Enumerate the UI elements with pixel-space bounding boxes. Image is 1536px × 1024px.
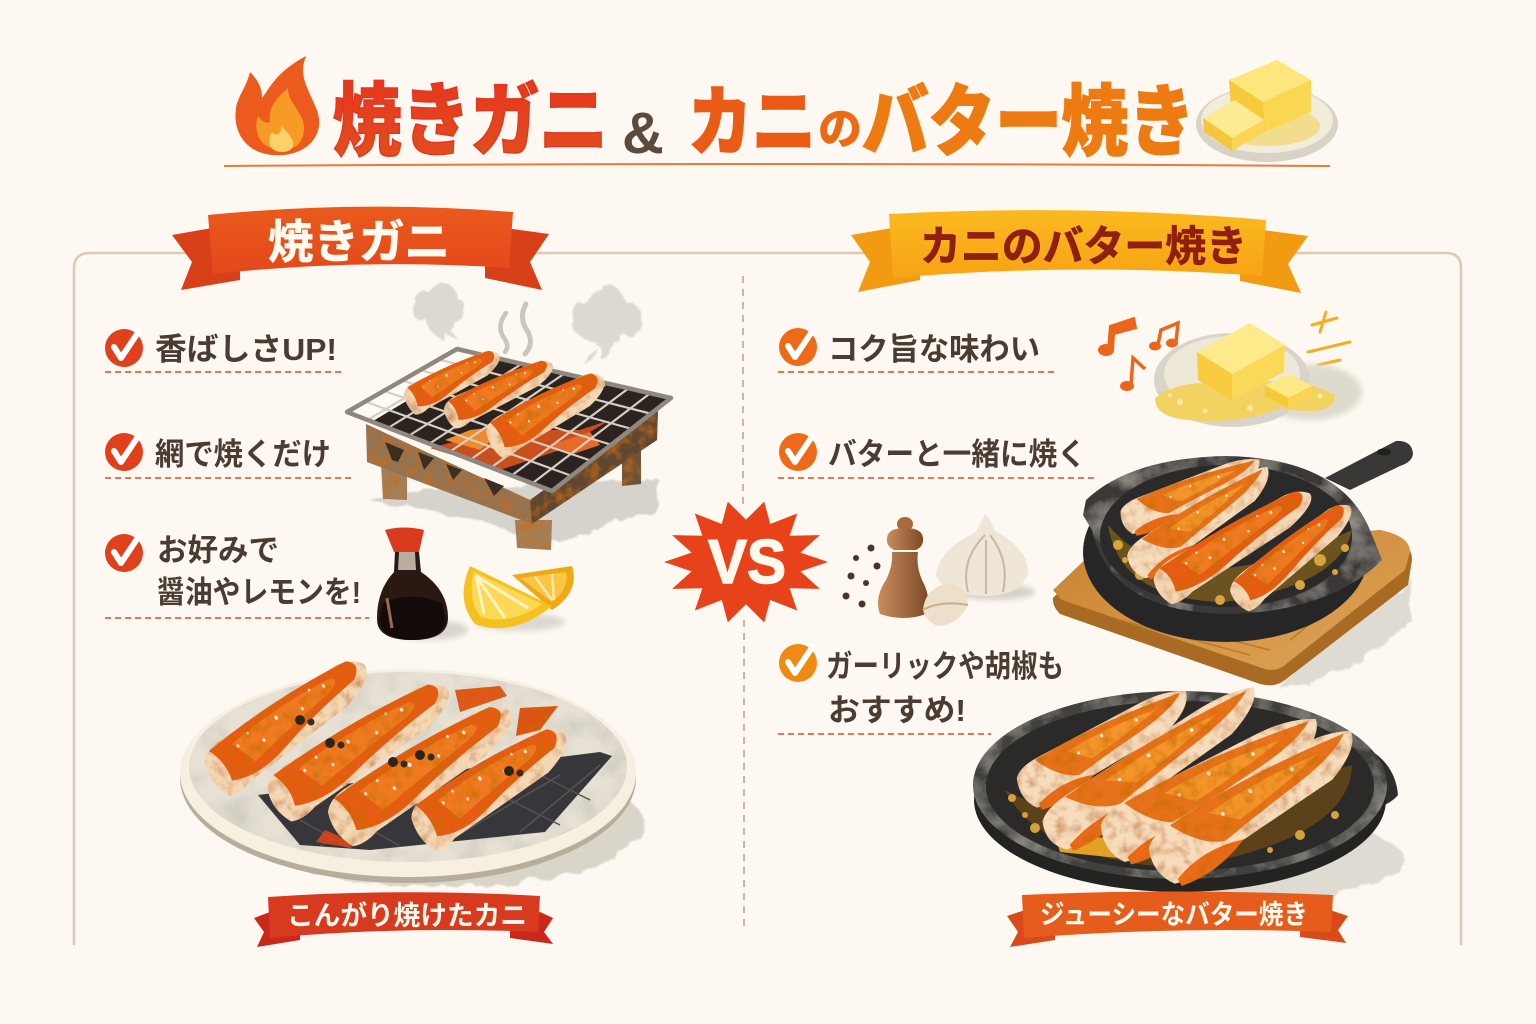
grill box: [366, 408, 658, 524]
icon: butter plate: [1196, 60, 1338, 162]
board shadow: [1280, 580, 1412, 690]
crab legs in pan: [1010, 678, 1376, 895]
skillet body: [1083, 462, 1369, 642]
point: 香ばしさUP: [105, 329, 344, 372]
icon: garlic: [923, 514, 1035, 626]
VS badge: VS: [708, 528, 786, 597]
point: バターと一緒に焼く: [778, 433, 1096, 478]
ribbon: こんがり焼けたカニ: こんがり焼けたカニ: [287, 900, 527, 931]
point: コク旨な味わい: [778, 328, 1054, 372]
grill shadow: [368, 480, 660, 548]
VS badge: [664, 502, 828, 622]
point: 醤油やレモン: お好みで: [157, 533, 279, 568]
crab legs on grill: [400, 344, 615, 461]
point: ガーリックや胡椒も: ガーリックや胡椒も: [826, 649, 1064, 684]
icon: peppercorns: [842, 544, 880, 608]
icon: lemon: [464, 566, 574, 631]
ribbon: こんがり焼けたカニ: [254, 892, 553, 947]
plate: [180, 673, 636, 883]
title: カニ: [688, 81, 816, 166]
title: &: [622, 101, 664, 166]
point: ガーリックや胡椒も: おすすめ!: [828, 693, 966, 728]
board: [1053, 530, 1412, 685]
crab legs on plate: [196, 648, 582, 856]
icon: smoke: [410, 283, 642, 363]
coals: [350, 349, 670, 490]
list: 焼きガニ points: [105, 329, 369, 618]
point: 醤油やレモン: [105, 533, 369, 618]
plate shadow: [235, 763, 645, 887]
banner: 焼きガニ: [172, 207, 549, 290]
icon: music notes: [1098, 318, 1178, 391]
illustration: charcoal grill: [347, 344, 671, 550]
grate: [365, 354, 652, 484]
grill mat: [258, 752, 612, 850]
ribbon: ジューシーなバター焼き: ジューシーなバター焼き: [1040, 900, 1308, 930]
center divider: [743, 276, 744, 932]
point: ガーリックや胡椒も: [778, 644, 1064, 734]
icon: pepper mill: [878, 517, 928, 618]
illustration: grilled crab plate: [180, 648, 645, 887]
point: 香ばしさUP: 香ばしさUP!: [155, 332, 337, 367]
ribbon: ジューシーなバター焼き: [1007, 892, 1348, 947]
crab legs in skillet: [1116, 452, 1364, 615]
pan shadow: [1115, 820, 1405, 900]
illustration: butter-fried crab pan: [973, 678, 1405, 900]
title underline: [224, 164, 1330, 166]
icon: flame: [235, 56, 319, 155]
title: の: [818, 105, 862, 154]
banner: カニのバター焼き: [851, 210, 1308, 293]
point: 網で焼くだけ: 網で焼くだけ: [155, 437, 331, 472]
pan body: [974, 708, 1386, 892]
title: バター焼き: [862, 78, 1195, 166]
icon: soy sauce bottle: [377, 528, 468, 640]
banner: カニのバター焼き: カニのバター焼き: [920, 223, 1247, 270]
skillet handle: [1325, 441, 1413, 490]
pan handle: [1360, 745, 1398, 810]
title: [333, 77, 1195, 166]
illustration: skillet on wooden board: [1053, 441, 1413, 690]
panel frame: [74, 253, 1461, 945]
icon: sparkles: [1308, 312, 1350, 365]
grill legs: [381, 450, 641, 550]
point: 醤油やレモン: 醤油やレモンを!: [157, 575, 361, 610]
list: バター焼き points: [778, 328, 1096, 734]
title: 焼きガニ: [333, 77, 608, 166]
banner: 焼きガニ: 焼きガニ: [268, 216, 450, 268]
char marks: [295, 715, 524, 776]
point: 網で焼くだけ: [105, 433, 355, 478]
icon: butter bowl: [1154, 323, 1362, 427]
point: バターと一緒に焼く: バターと一緒に焼く: [828, 437, 1086, 472]
point: コク旨な味わい: コク旨な味わい: [828, 332, 1040, 367]
